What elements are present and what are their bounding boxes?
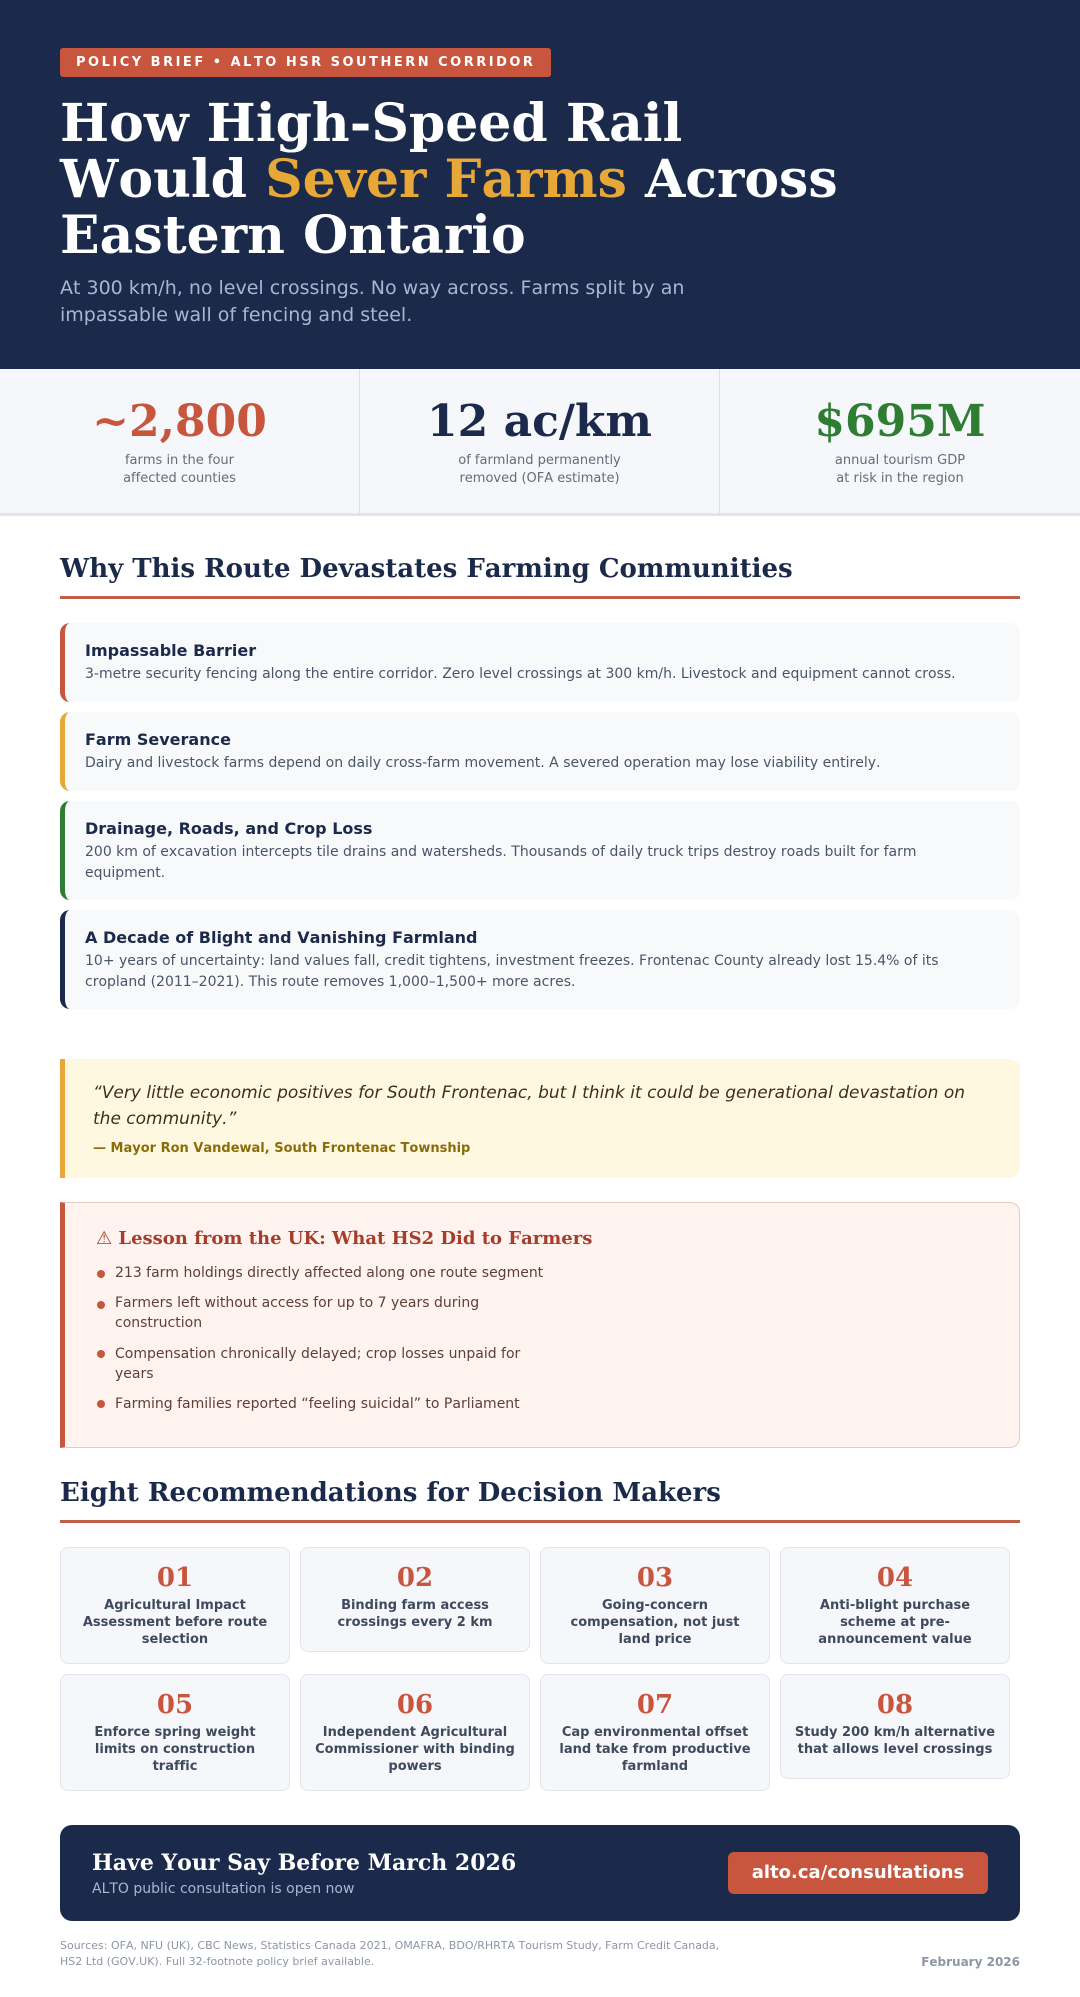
bullet list [97,1265,543,1412]
bullet list: Farmers left without access for up to 7 years during [115,1295,479,1311]
title: Would Sever Farms Across [60,149,838,210]
recommendation 06 [300,1674,530,1791]
recommendation 04 [780,1547,1010,1664]
recommendation 07: 07 [637,1690,673,1720]
stat: farms: ~2,800 [92,396,267,447]
recommendation 06: 06 [397,1690,433,1720]
recommendation 03: land price [618,1632,692,1647]
stat: tourism: annual tourism GDP [835,452,965,468]
panel: HS2 lesson [60,1202,1020,1448]
panel: impassable barrier [60,623,1020,702]
stat: acres: 12 ac/km [427,396,652,447]
badge [60,48,551,77]
title: How High-Speed Rail [60,93,682,154]
recommendation 06: Independent Agricultural [323,1725,507,1740]
recommendation 08: 08 [877,1690,913,1720]
recommendation 07 [540,1674,770,1791]
recommendation 05: limits on construction [95,1742,255,1757]
panel: drainage [60,801,1020,900]
recommendation 07: land take from productive [559,1742,751,1757]
recommendation 02: 02 [397,1563,433,1593]
bullet list: 213 farm holdings directly affected along one route segment [115,1265,543,1281]
callout: quote: “Very little economic positives for South Frontenac, but I think it could be generational devastation on [93,1083,965,1103]
panel: drainage: 200 km of excavation intercepts tile drains and watersheds. Thousands of daily truck trips destroy roads built for farm [85,844,917,860]
stat: acres [360,369,720,514]
panel: blight [60,910,1020,1009]
stat: tourism: $695M [814,396,986,447]
recommendation 05: Enforce spring weight [94,1725,256,1740]
bullet list: construction [115,1315,202,1331]
panel: drainage: Drainage, Roads, and Crop Loss [85,819,372,838]
bullet list: Farming families reported “feeling suicidal” to Parliament [115,1396,520,1412]
badge: POLICY BRIEF • ALTO HSR SOUTHERN CORRIDOR [76,55,535,70]
heading: why this route: Why This Route Devastates Farming Communities [60,554,793,584]
recommendation 02: Binding farm access [341,1598,489,1613]
date: February 2026 [921,1955,1020,1969]
panel: blight: cropland (2011–2021). This route removes 1,000–1,500+ more acres. [85,974,575,990]
stat: farms: affected counties [123,470,236,486]
recommendation 08: Study 200 km/h alternative [795,1725,995,1740]
panel heading: ⚠ Lesson from the UK: What HS2 Did to Farmers [96,1228,592,1249]
CTA heading: Have Your Say Before March 2026 [92,1850,516,1876]
CTA button: alto.ca/consultations [752,1862,964,1883]
recommendation 03 [540,1547,770,1664]
recommendation 08: that allows level crossings [798,1742,992,1757]
title: Eastern Ontario [60,205,526,266]
recommendation 01: Agricultural Impact [104,1598,246,1613]
panel: farm severance [60,712,1020,791]
callout: quote [60,1059,1020,1178]
recommendation 04: 04 [877,1563,913,1593]
recommendation 07: Cap environmental offset [562,1725,748,1740]
recommendation 04: Anti-blight purchase [820,1598,970,1613]
panel: impassable barrier: Impassable Barrier [85,641,256,660]
bullet list: Compensation chronically delayed; crop losses unpaid for [115,1346,520,1362]
recommendation 02: crossings every 2 km [337,1615,493,1630]
recommendation 08 [780,1674,1010,1779]
recommendation 04: announcement value [818,1632,972,1647]
title [60,93,838,266]
call to action [60,1825,1020,1921]
sources: Sources: OFA, NFU (UK), CBC News, Statistics Canada 2021, OMAFRA, BDO/RHRTA Tourism Study, Farm Credit Canada, [60,1939,719,1952]
callout: quote: the community.” [93,1108,236,1128]
recommendation 03: Going-concern [602,1598,708,1613]
stats band [0,369,1080,516]
CTA button [728,1852,988,1894]
callout: quote: — Mayor Ron Vandewal, South Frontenac Township [93,1141,470,1156]
panel: blight: 10+ years of uncertainty: land values fall, credit tightens, investment freezes. Frontenac County already lost 15.4% of its [85,953,939,969]
subtitle [60,277,684,326]
stat: farms [0,369,360,514]
recommendation 02 [300,1547,530,1652]
heading: recommendations: Eight Recommendations for Decision Makers [60,1478,721,1508]
recommendation 04: scheme at pre- [840,1615,950,1630]
sources [60,1939,719,1968]
subtitle: At 300 km/h, no level crossings. No way across. Farms split by an [60,277,684,299]
bullet list: years [115,1366,154,1382]
panel: drainage: equipment. [85,865,165,881]
header band [0,0,1080,369]
subtitle: impassable wall of fencing and steel. [60,304,412,326]
stat: tourism: at risk in the region [836,470,964,486]
recommendation 01: 01 [157,1563,193,1593]
recommendation 05 [60,1674,290,1791]
panel: impassable barrier: 3-metre security fencing along the entire corridor. Zero level crossings at 300 km/h. Livestock and equipment cannot cross. [85,666,956,682]
recommendation 06: powers [388,1759,442,1774]
panel: blight: A Decade of Blight and Vanishing Farmland [85,928,477,947]
recommendation 05: 05 [157,1690,193,1720]
stat: tourism [814,396,986,486]
panel: farm severance: Farm Severance [85,730,231,749]
stat: acres: of farmland permanently [458,452,621,468]
recommendation 07: farmland [622,1759,688,1774]
sources: HS2 Ltd (GOV.UK). Full 32-footnote policy brief available. [60,1955,374,1968]
stat: farms: farms in the four [125,452,234,468]
recommendation 01: selection [142,1632,208,1647]
recommendation 06: Commissioner with binding [315,1742,515,1757]
stat: acres: removed (OFA estimate) [459,470,620,486]
recommendation 03: 03 [637,1563,673,1593]
recommendation 01 [60,1547,290,1664]
panel: farm severance: Dairy and livestock farms depend on daily cross-farm movement. A severed operation may lose viability entirely. [85,755,881,771]
CTA subtext: ALTO public consultation is open now [92,1881,354,1897]
recommendation 05: traffic [153,1759,197,1774]
recommendation 03: compensation, not just [570,1615,739,1630]
recommendation 01: Assessment before route [83,1615,267,1630]
